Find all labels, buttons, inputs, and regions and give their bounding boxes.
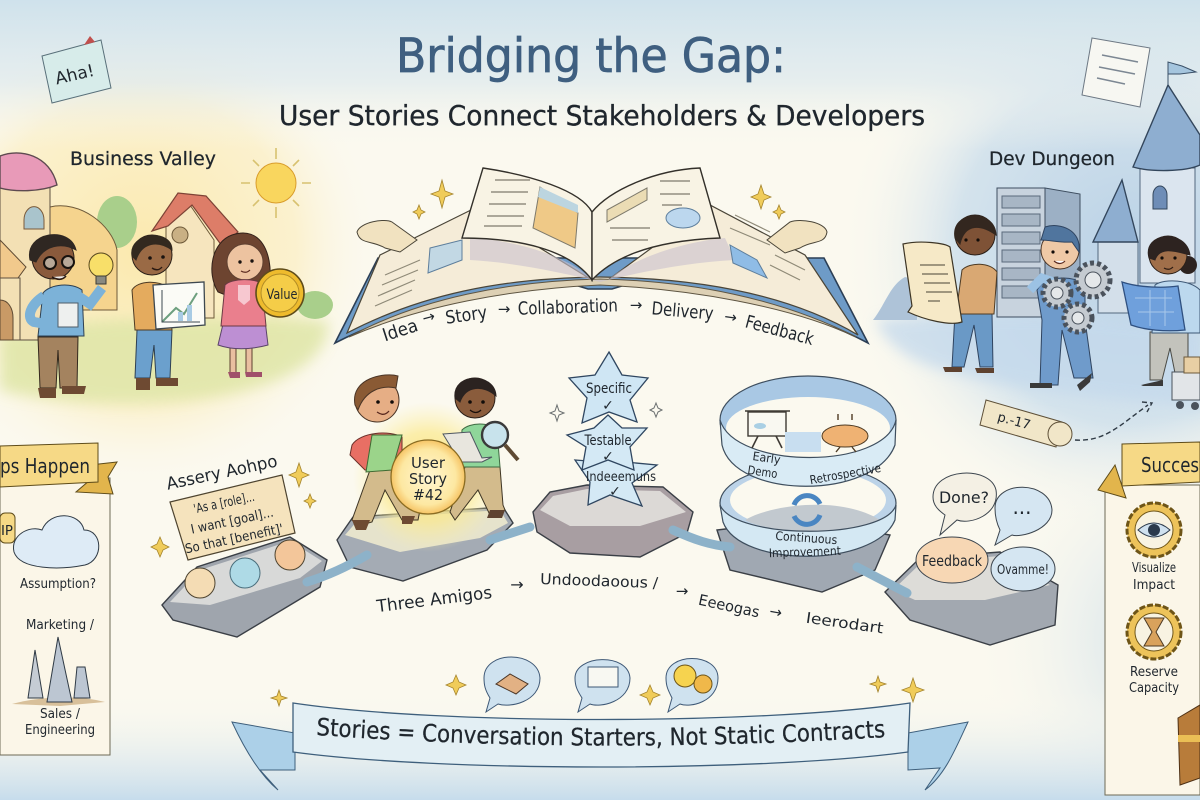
book flow labels: Feedback xyxy=(743,311,816,350)
INVEST stars: ✓ xyxy=(602,449,614,465)
process flow: → xyxy=(510,575,524,594)
conversation icons xyxy=(484,657,718,712)
panel: success: Visualize xyxy=(1132,561,1176,576)
page details xyxy=(484,180,690,240)
process flow: Eeeogas xyxy=(697,591,761,621)
INVEST stars: Specific xyxy=(586,381,632,397)
person left xyxy=(350,375,420,530)
heading: Dev Dungeon: Dev Dungeon xyxy=(989,148,1115,170)
book flow labels: Story xyxy=(444,302,489,329)
scene: Dev Dungeon xyxy=(873,62,1200,410)
person: man with lightbulb xyxy=(29,235,113,398)
person: dev with scroll xyxy=(903,215,997,373)
star 2 xyxy=(567,415,647,470)
panel: gaps happen: Marketing / xyxy=(26,618,95,633)
scene: Business Valley xyxy=(0,148,333,403)
lower pages xyxy=(347,205,858,335)
scroll: p.17 xyxy=(980,400,1072,447)
icon: towers xyxy=(12,637,105,706)
banner text: Stories = Conversation Starters, Not Static Contracts xyxy=(317,718,884,748)
story template: So that [benefit]' xyxy=(184,522,285,557)
user story people xyxy=(350,375,518,552)
person: dev with blueprint xyxy=(1122,236,1200,386)
icon: hourglass xyxy=(1127,605,1181,659)
note: Aha! xyxy=(42,36,111,103)
icon: gears xyxy=(1043,263,1110,332)
icon: emoji faces xyxy=(666,658,718,712)
panel: gaps happen xyxy=(0,443,117,755)
connectors xyxy=(307,527,907,593)
INVEST stars: ✓ xyxy=(609,484,621,500)
lower ring: Continuous xyxy=(775,529,838,547)
stone 2 xyxy=(337,507,513,581)
icon: round table xyxy=(822,414,868,452)
story template xyxy=(165,452,305,598)
panel: success: Impact xyxy=(1133,578,1175,593)
INVEST stars xyxy=(550,352,662,506)
book flow labels: → xyxy=(630,296,642,314)
person: man with chart xyxy=(132,235,205,390)
icon: presentation xyxy=(575,660,630,712)
open book xyxy=(335,168,868,350)
bubble: IP: IP xyxy=(1,524,13,539)
stone 1 xyxy=(162,537,327,637)
lower ring xyxy=(720,465,896,560)
INVEST stars: ✓ xyxy=(602,398,614,414)
icon: sun xyxy=(241,148,311,218)
lower page lines xyxy=(375,215,805,306)
banner xyxy=(231,702,969,790)
stone 3 xyxy=(533,485,693,557)
process flow: → xyxy=(676,582,688,600)
star 3 xyxy=(575,450,657,506)
panel: success xyxy=(1098,442,1200,795)
book flow labels: Idea xyxy=(380,315,421,346)
story coin: User xyxy=(411,454,446,472)
upper ring xyxy=(720,376,896,487)
process flow: → xyxy=(768,602,784,622)
panel heading ribbon xyxy=(1098,442,1200,498)
arrow: scroll to success xyxy=(1075,402,1152,440)
person: woman with value coin xyxy=(212,233,304,378)
book flow labels xyxy=(380,295,816,350)
star 1 xyxy=(569,352,648,423)
story coin: #42 xyxy=(413,486,443,504)
story template: I want [goal]... xyxy=(190,506,275,538)
panel: gaps happen: Engineering xyxy=(25,723,95,738)
process flow xyxy=(375,570,885,637)
retrospective rings xyxy=(720,376,896,560)
story coin xyxy=(391,440,465,514)
process flow: Three Amigos xyxy=(375,583,493,617)
title: Bridging the Gap: xyxy=(396,29,786,84)
note: Aha!: Aha! xyxy=(53,61,96,89)
stepping stones xyxy=(162,485,1058,645)
speech bubbles xyxy=(916,473,1055,591)
story template: 'As a [role]... xyxy=(192,490,256,517)
panel: gaps happen: Sales / xyxy=(40,707,81,722)
server rack xyxy=(997,188,1080,317)
stone 5 xyxy=(885,552,1058,645)
upper page left xyxy=(462,168,592,280)
ground xyxy=(875,314,1200,405)
bubble: dots: ... xyxy=(1012,495,1032,519)
INVEST stars: Testable xyxy=(584,433,632,449)
cart xyxy=(1172,357,1200,410)
houses xyxy=(0,153,333,340)
icon: handshake xyxy=(484,657,540,712)
lower ring: Improvement xyxy=(769,544,841,560)
person: dev with gears xyxy=(1030,226,1110,391)
bubble: Done?: Done? xyxy=(939,488,989,507)
book cover xyxy=(335,258,868,343)
stone 4 xyxy=(717,520,890,592)
castle xyxy=(1093,62,1200,313)
book flow labels: Delivery xyxy=(651,298,715,325)
person right xyxy=(443,378,518,520)
bubble: Feedback: Feedback xyxy=(922,552,982,570)
upper ring: Early xyxy=(752,449,781,467)
person: woman with value coin: Value xyxy=(266,287,298,303)
panel: success: Reserve xyxy=(1130,665,1178,680)
sparkles xyxy=(151,180,924,706)
icon: presentation screen xyxy=(745,411,790,448)
title: User Stories Connect Stakeholders & Developers xyxy=(279,99,925,132)
scroll right xyxy=(767,220,827,253)
INVEST stars: Indeeemuns xyxy=(586,470,656,485)
book flow labels: → xyxy=(723,307,738,327)
icon: improvement cycle xyxy=(794,496,820,524)
panel: success: Capacity xyxy=(1129,681,1179,696)
book flow labels: Collaboration xyxy=(517,295,618,320)
story coin: Story xyxy=(409,470,447,488)
icon: cloud xyxy=(13,516,99,568)
book flow labels: → xyxy=(498,300,510,318)
scroll: p.17: p.-17 xyxy=(996,410,1032,433)
title xyxy=(279,29,925,132)
bubble: Ovamme: Ovamme! xyxy=(997,563,1049,578)
process flow: Ieerodart xyxy=(805,609,885,637)
scroll left xyxy=(357,220,417,252)
note: document xyxy=(1082,38,1150,107)
heading: Business Valley: Business Valley xyxy=(70,148,216,170)
panel heading ribbon xyxy=(0,443,117,494)
upper page right xyxy=(592,168,720,280)
upper ring: Retrospective xyxy=(809,461,882,487)
icon: eye xyxy=(1127,503,1181,557)
icon: treasure chest xyxy=(1178,705,1200,785)
story template: Assery Aohpo xyxy=(165,452,279,495)
upper ring: Demo xyxy=(747,463,778,481)
panel: gaps happen: Assumption? xyxy=(20,577,96,592)
ground xyxy=(0,317,328,403)
bubble: IP xyxy=(0,513,15,543)
panel heading ribbon: ps Happen xyxy=(0,454,90,478)
rock xyxy=(873,277,917,320)
process flow: Undoodaoous / xyxy=(540,570,659,592)
book flow labels: → xyxy=(420,307,437,327)
